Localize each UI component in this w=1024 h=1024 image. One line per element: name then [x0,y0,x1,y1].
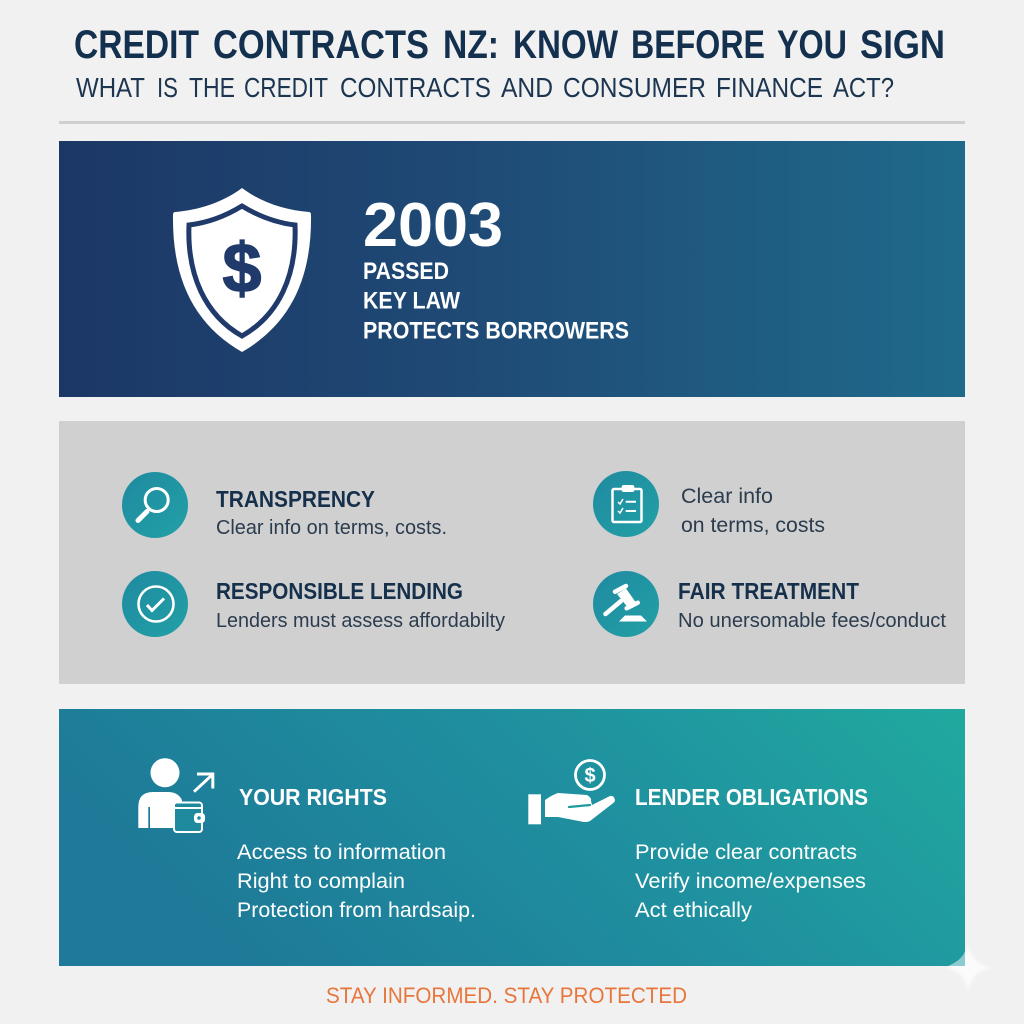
clear info text: on terms, costs [681,514,825,537]
lender obligations list [635,841,866,922]
your rights list: Right to complain [237,870,405,893]
icon: shield with dollar sign: $ [223,229,261,307]
clear info text: Clear info [681,485,773,508]
responsible lending heading: RESPONSIBLE LENDING [216,578,463,604]
lender obligations list: Provide clear contracts [635,841,857,864]
icon: clipboard checklist [593,471,659,537]
panel: rights and obligations [59,709,965,966]
your rights heading: YOUR RIGHTS [239,784,387,810]
icon: gavel [593,571,659,637]
subtitle: AND [501,72,553,103]
icon: hand holding coin: $ [584,765,596,787]
panel: key facts banner [59,141,965,397]
year: 2003 [363,191,503,260]
subtitle: CREDIT [244,72,328,103]
fact: key law: KEY LAW [363,288,460,314]
fact: protects borrowers: PROTECTS BORROWERS [363,318,629,344]
your rights list: Protection from hardsaip. [237,899,476,922]
title: BEFORE [631,23,765,67]
lender obligations heading: LENDER OBLIGATIONS [635,784,868,810]
subtitle: CONSUMER [563,72,706,103]
title [74,23,945,67]
icon: person with wallet and arrow [138,758,213,832]
fair treatment text: No unersomable fees/conduct [678,610,946,632]
your rights list [237,841,476,922]
icon: check mark [122,571,188,637]
fact: passed: PASSED [363,258,449,285]
subtitle [76,72,894,103]
icon: hand holding coin [528,760,615,824]
title: YOU [777,23,847,67]
fair treatment heading: FAIR TREATMENT [678,578,859,604]
subtitle: IS [157,72,178,103]
subtitle: WHAT [76,72,145,103]
title: SIGN [860,23,945,67]
title: NZ: [443,23,499,67]
subtitle: THE [189,72,235,103]
title: CREDIT [74,23,199,67]
transparency heading: TRANSPRENCY [216,486,375,512]
lender obligations list: Verify income/expenses [635,870,866,893]
icon: sparkle [945,944,992,993]
subtitle: ACT? [833,72,894,103]
subtitle: CONTRACTS [340,72,491,103]
icon: shield with dollar sign [173,188,311,352]
transparency text: Clear info on terms, costs. [216,517,447,539]
title: KNOW [513,23,618,67]
icon: magnifying glass [122,472,188,538]
your rights list: Access to information [237,841,446,864]
responsible lending text: Lenders must assess affordabilty [216,610,505,632]
subtitle: FINANCE [716,72,823,103]
title: CONTRACTS [213,23,429,67]
clear info text [681,485,825,537]
panel: principles [59,421,965,684]
lender obligations list: Act ethically [635,899,753,922]
footer tagline: STAY INFORMED. STAY PROTECTED [326,983,687,1008]
